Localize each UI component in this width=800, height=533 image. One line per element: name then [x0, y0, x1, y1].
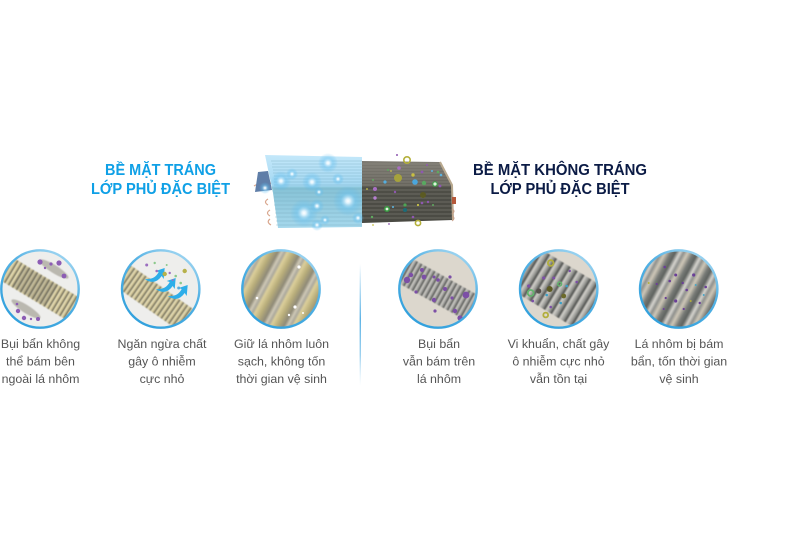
caption 6: vệ sinh	[659, 372, 699, 386]
heading: uncoated surface: BỀ MẶT KHÔNG TRÁNG	[473, 161, 647, 179]
heading: coated surface	[91, 162, 231, 198]
caption 5: ô nhiễm cực nhỏ	[512, 354, 605, 368]
caption 1: thể bám bên	[6, 354, 75, 368]
caption 6: Lá nhôm bị bám	[635, 337, 723, 351]
heading: coated surface: LỚP PHỦ ĐẶC BIỆT	[91, 180, 231, 198]
sparkles on clean half	[259, 153, 364, 231]
caption 3: sạch, không tốn	[238, 354, 325, 368]
caption 1: ngoài lá nhôm	[2, 372, 79, 386]
caption 2: cực nhỏ	[140, 372, 185, 386]
caption 3	[234, 337, 329, 386]
heading: coated surface: BỀ MẶT TRÁNG	[105, 162, 216, 179]
caption 2	[118, 337, 207, 386]
caption 4: Bụi bẩn	[418, 337, 460, 351]
caption 6	[631, 337, 727, 386]
clean half of coil with blue sheen	[265, 155, 362, 228]
circle 4: dust still clings	[398, 249, 478, 329]
caption 1	[1, 337, 80, 386]
caption 2: gây ô nhiễm	[128, 354, 196, 368]
caption 5	[508, 337, 610, 386]
caption 2: Ngăn ngừa chất	[118, 337, 207, 351]
copper tube ends left	[254, 174, 271, 225]
circle 6: dirty fins	[640, 250, 718, 328]
particles on dirty half	[366, 154, 442, 226]
caption 4	[403, 337, 475, 386]
heading: uncoated surface	[473, 161, 647, 198]
dirty half of coil	[362, 161, 456, 223]
circle 3: clean aluminium fins	[242, 250, 320, 328]
caption 4: vẫn bám trên	[403, 354, 475, 368]
caption 4: lá nhôm	[417, 372, 461, 386]
caption 3: thời gian vệ sinh	[236, 372, 327, 386]
caption 3: Giữ lá nhôm luôn	[234, 337, 329, 351]
heading: uncoated surface: LỚP PHỦ ĐẶC BIỆT	[490, 180, 630, 198]
illustration: heat exchanger coil, half clean and half dirty	[254, 153, 456, 231]
caption 1: Bụi bẩn không	[1, 337, 80, 351]
circle 5: bacteria and pollutants remain	[518, 249, 599, 329]
circle 2: blocks tiny pollutants	[120, 249, 201, 329]
caption 5: vẫn tồn tại	[530, 371, 587, 386]
caption 5: Vi khuẩn, chất gây	[508, 337, 610, 351]
caption 6: bẩn, tốn thời gian	[631, 354, 727, 368]
circle 1: dust cannot cling to the fins	[0, 250, 90, 328]
